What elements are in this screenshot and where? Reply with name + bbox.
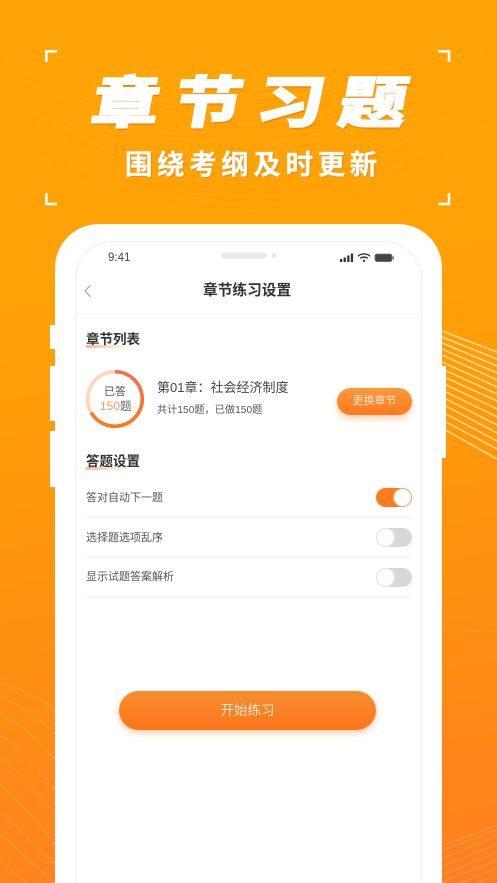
icon: back chevron	[84, 284, 91, 298]
phone screen	[75, 241, 422, 883]
section heading: chapter list: 章节列表	[86, 332, 140, 347]
icon: viewfinder corner brackets	[45, 50, 450, 206]
progress ring	[86, 370, 144, 428]
page header title: 章节练习设置	[203, 283, 291, 299]
chapter stats: 共计150题，已做150题	[157, 405, 262, 416]
ring label: answered: 已答	[104, 386, 126, 398]
section heading: answer settings: 答题设置	[86, 454, 140, 469]
toggle off	[376, 528, 412, 547]
section underline: answer settings	[86, 467, 126, 470]
toggle off	[376, 568, 412, 586]
chapter name: 第01章：社会经济制度	[157, 380, 288, 395]
header divider	[76, 314, 421, 315]
title: 章节习题	[87, 72, 428, 135]
phone frame	[55, 224, 442, 883]
ring label: 150 questions: 150题	[100, 399, 132, 413]
setting row 2 label: 选择题选项乱序	[86, 532, 163, 544]
subtitle: 围绕考纲及时更新	[125, 149, 382, 180]
phone side buttons	[50, 325, 446, 487]
status time: 9:41	[108, 252, 130, 264]
toggle on	[376, 488, 412, 507]
start practice button: 开始练习	[220, 703, 274, 718]
start practice button	[119, 691, 376, 730]
setting row 1 label: 答对自动下一题	[86, 492, 163, 504]
setting row 3 label: 显示试题答案解析	[86, 571, 174, 583]
change chapter button: 更换章节	[352, 395, 396, 407]
change chapter button	[337, 388, 412, 415]
status icons	[340, 253, 394, 262]
notch speaker	[221, 252, 276, 258]
section underline: chapter list	[86, 345, 126, 348]
